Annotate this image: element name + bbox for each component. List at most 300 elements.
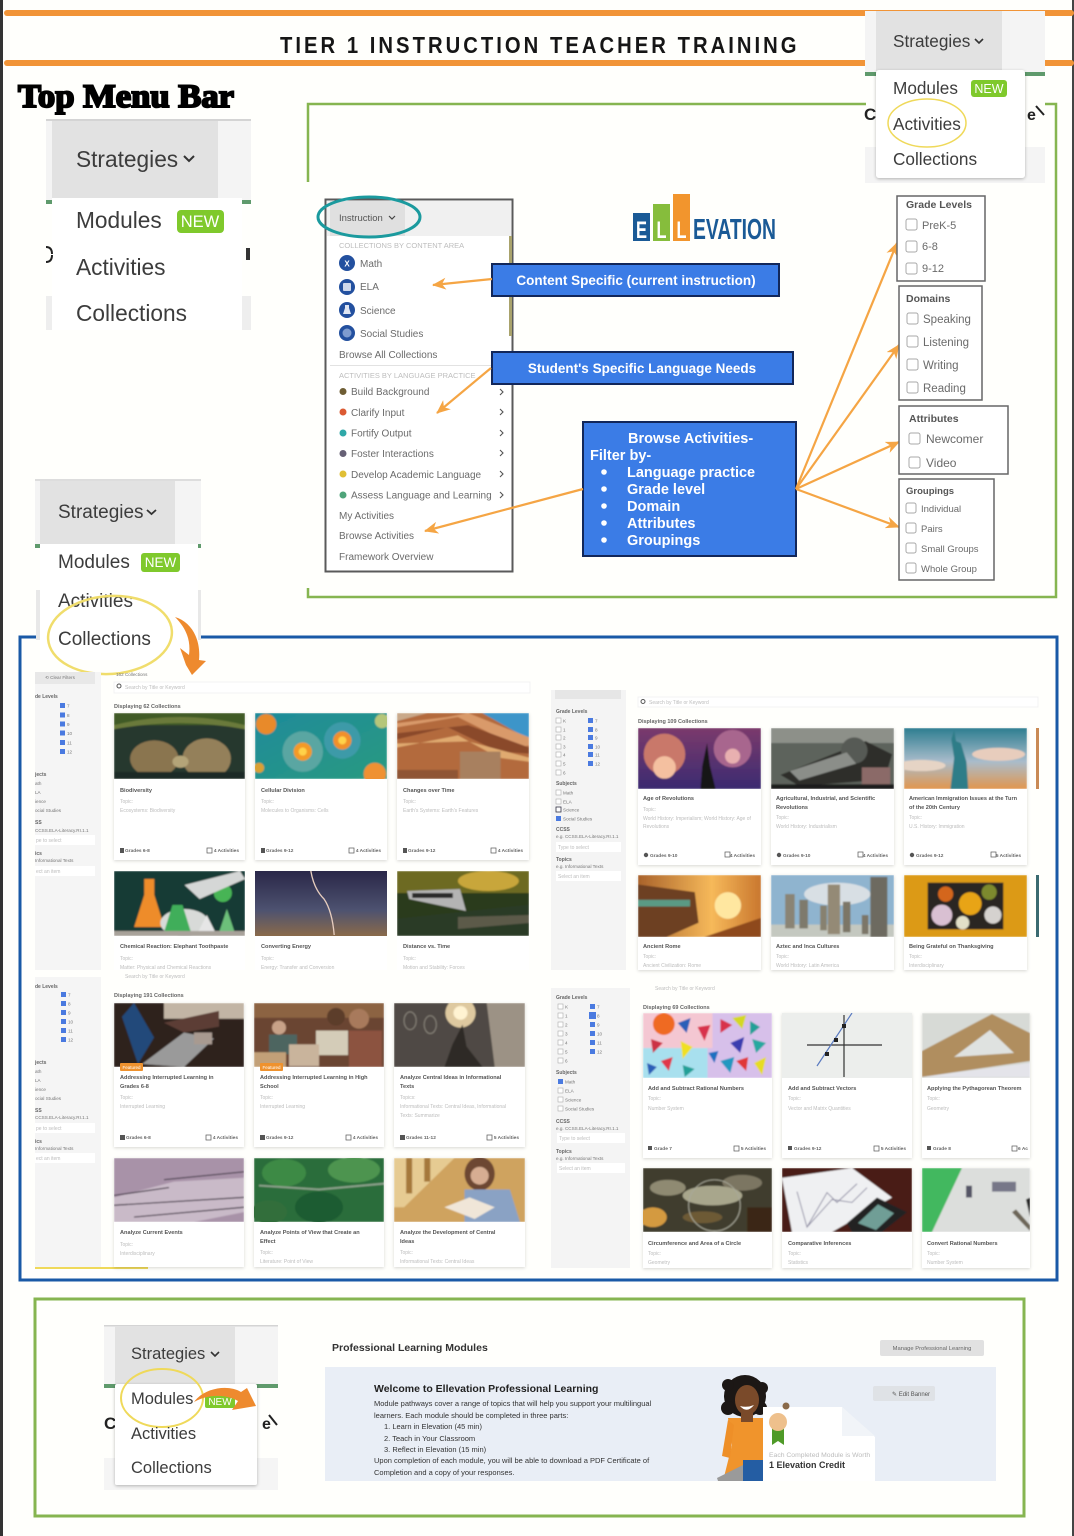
icon: science xyxy=(339,302,355,318)
checkboxes column: 9 xyxy=(67,722,70,727)
card: central ideas xyxy=(394,998,525,1147)
card: cellular division: Cellular Division xyxy=(261,788,305,794)
card: comparative inferences: Statistics xyxy=(788,1260,809,1266)
card: vectors: Grades 9-12 xyxy=(794,1146,822,1152)
panel: collections screenshot two: Topics xyxy=(556,857,572,863)
photo: coral underwater xyxy=(114,713,245,779)
filter: groupings: Pairs xyxy=(921,524,943,535)
checkboxes column: 9 xyxy=(68,1010,71,1016)
card: converting energy: Energy: Transfer and Conversion xyxy=(261,965,335,971)
photo: fireworks xyxy=(638,728,761,789)
card: american immigration xyxy=(896,728,1027,865)
panel: collections screenshot four: Subjects xyxy=(556,1070,577,1076)
header rules xyxy=(4,10,1074,66)
panel: collections screenshot three: ocial Studies xyxy=(35,1096,62,1101)
panel: collections screenshot one: Informational Texts xyxy=(35,858,74,863)
card: interrupted learning 6-8: Addressing Interrupted Learning in xyxy=(120,1075,214,1081)
card: cellular division: Grades 9-12 xyxy=(266,848,294,854)
card: changes over time: Earth's Systems: Earth's Features xyxy=(403,808,479,814)
callout: browse activities filter: Browse Activities- xyxy=(628,431,753,447)
card: central ideas development: Analyze the Development of Central xyxy=(400,1230,496,1236)
card: distance vs time: Topic: xyxy=(403,956,416,962)
card: interrupted learning high school: Topic: xyxy=(260,1095,273,1101)
cut off cards edge xyxy=(1036,728,1039,937)
card: american immigration: Topic: xyxy=(909,815,922,821)
filter: attributes: Attributes xyxy=(909,413,959,425)
panel: instruction dropdown menu: Framework Overview xyxy=(339,552,434,563)
icon: math: X xyxy=(344,260,350,268)
card: biodiversity: Topic: xyxy=(120,799,133,805)
card: agricultural revolutions: World History: Industrialism xyxy=(776,824,837,830)
card: points of view: Literature: Point of View xyxy=(260,1259,313,1265)
callout: browse activities filter: Attributes xyxy=(627,516,695,532)
panel: large strategies menu: NEW xyxy=(181,213,220,231)
card: vectors xyxy=(782,1013,912,1158)
panel: collections screenshot two: Science xyxy=(563,808,580,812)
menu rows: Fortify Output xyxy=(351,428,412,440)
checkboxes columns: 8 xyxy=(597,1014,600,1018)
card: age of revolutions: 4 Activities xyxy=(730,853,755,859)
photo: lightning xyxy=(255,871,387,936)
card: american immigration: of the 20th Century xyxy=(909,805,961,811)
logo: ELLEVATION: EVATION xyxy=(693,214,776,246)
callout: browse activities filter: Domain xyxy=(627,499,680,515)
card: age of revolutions: World History: Imperialism; World History: Age of xyxy=(643,816,752,822)
panel: collections screenshot three: ect an item xyxy=(36,1156,60,1162)
photo: newspapers xyxy=(114,1158,244,1222)
photo: steam locomotive xyxy=(771,728,894,789)
card: ancient rome: Ancient Rome xyxy=(643,944,681,950)
card: interrupted learning high school: 4 Activities xyxy=(353,1135,378,1141)
card: interrupted learning high school: Addressing Interrupted Learning in High xyxy=(260,1075,368,1081)
highlight: collections circle xyxy=(45,592,175,678)
panel: collections screenshot four: ELA xyxy=(565,1088,575,1094)
panel: collections strategies menu: Activities xyxy=(58,591,133,612)
card: changes over time: Changes over Time xyxy=(403,788,455,794)
panel: instruction dropdown menu xyxy=(318,197,512,572)
checkboxes column: 7 xyxy=(67,704,70,708)
panel: collections screenshot one: ⟲ Clear Filters xyxy=(45,675,76,680)
card: being grateful on thanksgiving: Being Grateful on Thanksgiving xyxy=(909,944,994,950)
filter: attributes xyxy=(899,406,1008,474)
checkboxes columns: 9 xyxy=(597,1022,600,1028)
photo: light bulb xyxy=(394,1003,525,1067)
panel: collections screenshot two: Select an item xyxy=(558,874,590,880)
callout: browse activities filter: Filter by- xyxy=(590,448,651,464)
card: converting energy: Converting Energy xyxy=(261,944,312,950)
filter: domains: Domains xyxy=(906,293,951,305)
filter: domains xyxy=(899,286,982,400)
panel: collections screenshot four: Math xyxy=(565,1080,576,1084)
checkboxes column xyxy=(61,992,74,1042)
panel: large strategies menu: Modules xyxy=(76,207,162,233)
card: interrupted learning 6-8: Grades 6-8 xyxy=(120,1084,149,1090)
card: distance vs time: Distance vs. Time xyxy=(403,944,450,950)
card: cellular division: 4 Activities xyxy=(356,848,381,854)
card: comparative inferences: Comparative Inferences xyxy=(788,1241,851,1247)
card: rational numbers: Add and Subtract Rational Numbers xyxy=(648,1086,744,1092)
panel: modules strategies menu: Strategies xyxy=(131,1345,205,1363)
card: distance vs time: Motion and Stability: Forces xyxy=(403,965,465,971)
panel: instruction dropdown menu: COLLECTIONS BY CONTENT AREA xyxy=(339,241,464,250)
card: convert rational numbers: Topic: xyxy=(927,1251,940,1257)
button: manage professional learning: Manage Professional Learning xyxy=(893,1346,971,1352)
card: american immigration: Grades 9-12 xyxy=(916,853,944,859)
panel: welcome banner xyxy=(325,1367,996,1481)
panel: collections screenshot three xyxy=(34,974,525,1269)
panel: collections section blue frame xyxy=(20,637,1057,1280)
checkboxes columns: 6 xyxy=(563,770,566,776)
panel: instruction dropdown menu: Browse All Collections xyxy=(339,350,437,361)
panel: large strategies menu: Activities xyxy=(76,254,166,280)
checkboxes columns: 5 xyxy=(563,762,566,766)
filter: groupings: Small Groups xyxy=(921,544,979,555)
panel: top right strategies menu: e xyxy=(1027,107,1036,124)
card: circumference: Topic: xyxy=(648,1251,661,1257)
panel: collections screenshot one: CCSS.ELA-Literacy.RI.1.1 xyxy=(35,828,89,833)
card: rational numbers: Grade 7 xyxy=(654,1146,672,1152)
card: rational numbers: Topic: xyxy=(648,1096,661,1102)
panel: collections screenshot one: SS xyxy=(35,820,42,826)
panel: collections screenshot one: jects xyxy=(34,772,47,778)
panel: collections screenshot two: Subjects xyxy=(556,781,577,787)
card: changes over time: 4 Activities xyxy=(498,848,523,854)
panel: collections screenshot four: e.g. Informational Texts xyxy=(556,1156,604,1161)
panel: large strategies menu: Collections xyxy=(76,300,187,326)
arrow: orange curved xyxy=(175,617,206,675)
card: cellular division: Topic: xyxy=(261,799,274,805)
card: interrupted learning high school: School xyxy=(260,1084,279,1090)
illustration: woman xyxy=(717,1375,768,1481)
panel: collections screenshot two: e.g. CCSS.ELA-Literacy.RI.1.1 xyxy=(556,834,619,839)
card: central ideas development xyxy=(394,1157,525,1267)
arrows: callouts to menu and filters xyxy=(425,243,899,531)
checkboxes column: 10 xyxy=(68,1020,74,1024)
photo: train xyxy=(397,871,529,936)
panel: collections screenshot two: Search by Title or Keyword xyxy=(649,700,709,706)
card: changes over time: Grades 9-12 xyxy=(408,848,436,854)
panel: instruction dropdown menu: Math xyxy=(360,259,382,270)
card: agricultural revolutions: 4 Activities xyxy=(863,853,888,859)
panel: top right strategies menu xyxy=(864,11,1045,183)
panel: welcome banner: Module pathways cover a range of topics that will help you support your multilingual xyxy=(374,1399,652,1408)
card: age of revolutions: Age of Revolutions xyxy=(643,796,694,802)
card: central ideas: Texts: Summarize xyxy=(400,1113,440,1119)
card: central ideas: Texts xyxy=(400,1084,414,1090)
checkboxes column: 7 xyxy=(68,992,71,998)
checkboxes column: 11 xyxy=(67,740,72,746)
checkboxes columns: 11 xyxy=(597,1040,602,1046)
card: agricultural revolutions xyxy=(771,728,894,865)
illustration: certificate: Each Completed Module is Worth xyxy=(769,1452,870,1459)
logo: ELLEVATION xyxy=(633,194,776,246)
panel: collections screenshot four: Select an item xyxy=(559,1166,591,1172)
panel: instruction dropdown menu: Browse Activities xyxy=(339,531,414,542)
panel: collections screenshot one: Displaying 62 Collections xyxy=(114,704,181,710)
checkboxes columns: 10 xyxy=(597,1032,603,1036)
card: changes over time xyxy=(397,713,529,860)
panel: collections screenshot one: ience xyxy=(35,799,46,804)
panel: instruction dropdown menu: Social Studies xyxy=(360,329,423,340)
checkboxes columns xyxy=(558,1004,603,1064)
panel: collections screenshot two: CCSS xyxy=(556,827,571,833)
filter: domains: Speaking xyxy=(923,314,971,326)
card: central ideas: Grades 11-12 xyxy=(406,1135,436,1141)
panel: top right strategies menu: Activities xyxy=(893,114,961,134)
panel: collections screenshot three: LA xyxy=(35,1078,42,1083)
checkboxes columns: 2 xyxy=(563,736,566,740)
card: pythagorean theorem: 6 Ac xyxy=(1018,1146,1028,1152)
logo: ELLEVATION: L xyxy=(676,217,686,244)
panel: collections screenshot two xyxy=(551,690,1039,970)
card: agricultural revolutions: Topic: xyxy=(776,815,789,821)
card: vectors: Topic: xyxy=(788,1096,801,1102)
checkboxes columns: 6 xyxy=(565,1058,568,1064)
filter: attributes: Video xyxy=(926,456,957,470)
callout: browse activities filter: Groupings xyxy=(627,533,700,549)
panel: collections screenshot two: Math xyxy=(563,790,574,796)
panel: collections screenshot two: Type to select xyxy=(558,845,589,851)
card: pythagorean theorem xyxy=(922,1013,1030,1158)
filter: groupings: Groupings xyxy=(906,486,954,497)
menu rows: Assess Language and Learning xyxy=(351,490,492,502)
filter: grade levels xyxy=(897,196,985,281)
checkboxes column: 12 xyxy=(68,1038,74,1042)
panel: collections screenshot three: de Levels xyxy=(35,984,58,990)
panel: collections screenshot three: Search by Title or Keyword xyxy=(125,974,185,980)
card: age of revolutions: Topic: xyxy=(643,807,656,813)
checkboxes column: 12 xyxy=(67,750,73,754)
card: chemical reaction xyxy=(114,871,245,971)
card: interrupted learning high school: Interrupted Learning xyxy=(260,1104,305,1110)
panel: instruction dropdown menu: My Activities xyxy=(339,511,394,522)
checkboxes column: 10 xyxy=(67,731,73,736)
card: vectors: Add and Subtract Vectors xyxy=(788,1086,856,1092)
card: american immigration: 5 Activities xyxy=(996,853,1021,859)
card: american immigration: U.S. History: Immigration xyxy=(909,824,965,830)
filter: domains: Reading xyxy=(923,383,966,395)
panel: collections screenshot three: jects xyxy=(34,1060,47,1066)
panel: collections screenshot four: e.g. CCSS.ELA-Literacy.RI.1.1 xyxy=(556,1126,619,1131)
panel: collections screenshot four: Grade Levels xyxy=(556,995,588,1001)
menu rows: Clarify Input xyxy=(351,408,405,419)
card: circumference: Circumference and Area of a Circle xyxy=(648,1241,741,1247)
card: ancient rome xyxy=(638,875,761,970)
panel: collections screenshot one: de Levels xyxy=(35,694,58,700)
card: aztec and inca: Topic: xyxy=(776,954,789,960)
card: vectors: 5 Activities xyxy=(881,1146,906,1152)
photo: flasks xyxy=(114,871,245,936)
panel: modules strategies menu: C xyxy=(104,1414,116,1433)
card: interrupted learning high school xyxy=(254,1003,384,1147)
button: manage professional learning xyxy=(880,1340,984,1356)
panel: modules strategies menu: Activities xyxy=(131,1425,196,1443)
panel: collections screenshot three: Displaying 191 Collections xyxy=(114,993,184,999)
card: converting energy: Topic: xyxy=(261,956,274,962)
photo: forest bridge xyxy=(254,1158,384,1222)
panel: collections screenshot three: SS xyxy=(35,1108,42,1114)
card: biodiversity xyxy=(114,713,245,860)
card: distance vs time xyxy=(397,871,529,971)
card: american immigration: American Immigration Issues at the Turn xyxy=(909,796,1018,802)
photo: chart and phone xyxy=(782,1168,912,1232)
photo: colourful triangles xyxy=(643,1013,772,1078)
card: interrupted learning 6-8: Interrupted Learning xyxy=(120,1104,165,1110)
card: circumference xyxy=(639,1168,772,1268)
photo: statue of liberty xyxy=(904,728,1027,789)
callout: browse activities filter: Language practice xyxy=(627,465,755,481)
badge: featured xyxy=(260,1063,283,1071)
checkboxes columns: 7 xyxy=(595,718,598,724)
title: TIER 1 INSTRUCTION TEACHER TRAINING xyxy=(280,32,797,58)
card: chemical reaction: Chemical Reaction: Elephant Toothpaste xyxy=(120,944,228,950)
panel: collections screenshot four: Type to select xyxy=(559,1136,590,1142)
checkboxes columns: 3 xyxy=(563,744,566,750)
illustration: certificate xyxy=(763,1402,875,1481)
card: pythagorean theorem: Geometry xyxy=(927,1106,949,1112)
card: central ideas: 5 Activities xyxy=(494,1135,519,1141)
checkboxes columns: K xyxy=(563,718,567,724)
filter: grade levels: Grade Levels xyxy=(906,199,972,211)
checkboxes columns: 1 xyxy=(565,1014,568,1018)
panel: collections strategies menu xyxy=(35,479,201,660)
card: ancient rome: Topic: xyxy=(643,954,656,960)
card: age of revolutions: Grades 9-10 xyxy=(650,853,678,859)
checkboxes column: 11 xyxy=(68,1028,73,1034)
panel: instruction dropdown menu: Instruction xyxy=(339,213,383,224)
card: convert rational numbers: Convert Rational Numbers xyxy=(927,1241,998,1247)
panel: collections screenshot one: ect an item xyxy=(36,869,60,875)
card: current events: Topic: xyxy=(120,1242,133,1248)
panel: collections screenshot three: Informational Texts xyxy=(35,1146,74,1151)
panel: collections screenshot four: Social Studies xyxy=(565,1106,595,1112)
photo: pumpkins xyxy=(904,875,1027,937)
panel: collections screenshot four: Search by Title or Keyword xyxy=(655,986,715,992)
panel: collections screenshot one: pe to select xyxy=(36,838,62,844)
checkboxes column: 8 xyxy=(68,1002,71,1006)
card: central ideas development: Informational Texts: Central Ideas xyxy=(400,1259,475,1265)
card: central ideas: Informational Texts: Central Ideas, Informational xyxy=(400,1104,506,1110)
button: edit banner: ✎ Edit Banner xyxy=(892,1391,930,1398)
checkboxes columns: 4 xyxy=(563,752,566,758)
panel: welcome banner: 1. Learn in Elevation (45 min) xyxy=(384,1422,482,1431)
badge: featured: Featured xyxy=(122,1065,141,1070)
card: rational numbers: Number System xyxy=(648,1106,684,1112)
card: biodiversity: 4 Activities xyxy=(214,848,239,854)
card: pythagorean theorem: Grade 8 xyxy=(933,1146,951,1152)
card: current events xyxy=(114,1158,244,1267)
card: current events: Analyze Current Events xyxy=(120,1230,183,1236)
panel: collections strategies menu: Collections xyxy=(58,629,151,650)
callout: browse activities filter xyxy=(583,422,796,556)
panel: collections screenshot two: Social Studies xyxy=(563,816,593,822)
checkboxes columns: 8 xyxy=(595,728,598,732)
logo: ELLEVATION: L xyxy=(656,217,666,244)
card: aztec and inca: World History: Latin America xyxy=(776,963,839,969)
panel: welcome banner: 2. Teach in Your Classroom xyxy=(384,1434,475,1443)
checkboxes columns: K xyxy=(565,1004,569,1010)
panel: collections screenshot four: CCSS xyxy=(556,1119,571,1125)
photo: laptop xyxy=(114,1003,244,1067)
card: points of view: Analyze Points of View that Create an xyxy=(260,1230,360,1236)
photo: stone pillars xyxy=(771,875,894,937)
checkboxes columns: 5 xyxy=(565,1050,568,1054)
checkboxes columns: 12 xyxy=(597,1050,603,1054)
photo: graph xyxy=(782,1013,912,1078)
checkboxes columns: 9 xyxy=(595,736,598,740)
card: interrupted learning 6-8: Topic: xyxy=(120,1095,133,1101)
card: rational numbers xyxy=(643,1013,772,1158)
menu rows: Develop Academic Language xyxy=(351,470,482,481)
card: biodiversity: Ecosystems: Biodiversity xyxy=(120,808,176,814)
panel: modules strategies menu: NEW xyxy=(208,1397,232,1408)
card: aztec and inca: Aztec and Inca Cultures xyxy=(776,944,839,950)
checkboxes columns: 7 xyxy=(597,1004,600,1010)
checkboxes columns: 2 xyxy=(565,1022,568,1028)
photo: cells xyxy=(255,713,387,779)
photo: green notebook xyxy=(922,1168,1030,1232)
checkboxes column: 8 xyxy=(67,713,70,718)
callout: browse activities filter: Grade level xyxy=(627,482,705,498)
icon: math xyxy=(339,255,355,271)
panel: collections strategies menu: Modules xyxy=(58,552,130,573)
panel: collections screenshot three: ath xyxy=(35,1069,42,1074)
photo: girl reading xyxy=(394,1158,525,1222)
panel: collections screenshot four: Science xyxy=(565,1098,582,1102)
card: interrupted learning 6-8: 4 Activities xyxy=(213,1135,238,1141)
card: age of revolutions: Revolutions xyxy=(643,824,670,830)
callout: language needs xyxy=(492,352,793,384)
checkboxes columns xyxy=(556,718,601,776)
card: aztec and inca xyxy=(771,875,894,970)
panel: collections screenshot one: 162 Collections xyxy=(116,672,148,677)
panel: collections screenshot three: pe to select xyxy=(36,1126,62,1132)
panel: collections screenshot four xyxy=(551,986,1030,1268)
card: chemical reaction: Matter: Physical and Chemical Reactions xyxy=(120,965,212,971)
filter: groupings: Whole Group xyxy=(921,564,977,575)
panel: top right strategies menu: Collections xyxy=(893,149,977,169)
panel: top right strategies menu: Modules xyxy=(893,78,958,98)
card: ancient rome: Ancient Civilization: Rome xyxy=(643,963,701,969)
callout: content specific xyxy=(492,264,779,296)
panel: activities section green frame xyxy=(308,104,1056,597)
filter: attributes: Newcomer xyxy=(926,432,983,446)
panel: collections screenshot one: ocial Studies xyxy=(35,808,62,813)
panel: collections screenshot two: Grade Levels xyxy=(556,709,588,715)
panel: collections screenshot three: ics xyxy=(35,1139,42,1145)
illustration: certificate: 1 Elevation Credit xyxy=(769,1460,845,1470)
card: central ideas: Topics: xyxy=(400,1095,416,1101)
checkboxes columns: 1 xyxy=(563,728,566,732)
card: agricultural revolutions: Agricultural, Industrial, and Scientific xyxy=(776,796,875,802)
photo: students xyxy=(254,1003,384,1067)
card: converting energy xyxy=(255,871,387,971)
checkboxes column xyxy=(60,703,73,754)
panel: collections strategies menu: Strategies xyxy=(58,502,144,523)
card: convert rational numbers xyxy=(922,1168,1030,1268)
card: vectors: Vector and Matrix Quantities xyxy=(788,1106,851,1112)
card: being grateful on thanksgiving: Interdisciplinary xyxy=(909,963,944,969)
panel: collections screenshot one: LA xyxy=(35,790,42,795)
checkboxes columns: 3 xyxy=(565,1032,568,1036)
panel: collections strategies menu: NEW xyxy=(145,555,177,570)
card: points of view: Effect xyxy=(260,1239,276,1245)
heading: professional learning modules: Professional Learning Modules xyxy=(332,1342,488,1354)
badge: featured: Featured xyxy=(262,1065,281,1070)
callout: content specific: Content Specific (current instruction) xyxy=(516,273,756,288)
callout: language needs: Student's Specific Language Needs xyxy=(528,361,756,376)
menu rows xyxy=(340,387,503,502)
